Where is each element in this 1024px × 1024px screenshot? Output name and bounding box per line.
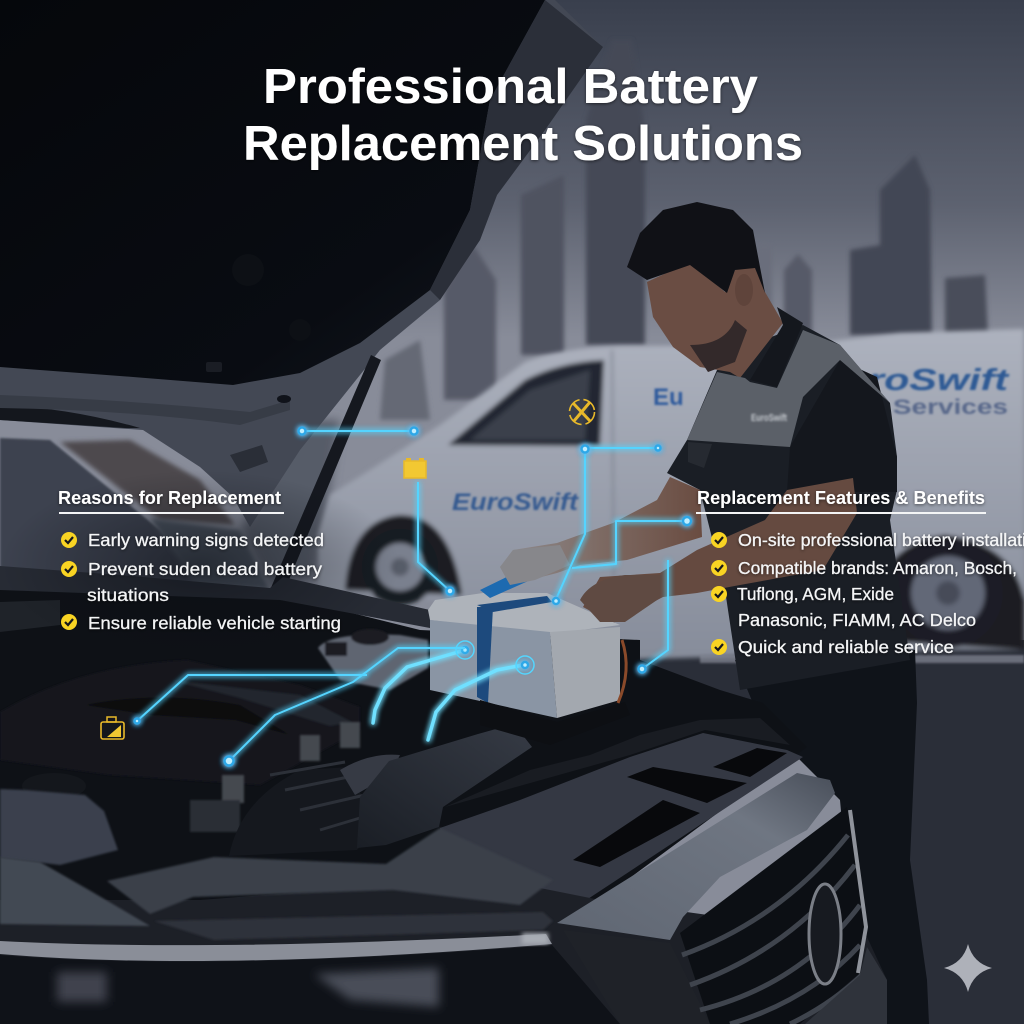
part: air box [357,724,532,848]
icon: battery level [101,717,124,739]
part: left reservoir body [0,789,118,865]
man: hand on terminal [580,575,662,622]
body: dark bumper corner [563,930,710,1024]
man: ear [735,274,753,306]
battery: shadow tray [480,700,630,745]
car: windshield behind hood [0,438,270,590]
part: left reservoir cap [22,773,86,799]
man: torso and head [500,202,910,690]
body: left fender plate [0,857,150,926]
part: right trim [440,718,803,922]
car: front body [0,773,887,1024]
body: long bar [154,912,553,940]
circuit: hood line [298,428,418,434]
man: face and neck [647,262,783,378]
van logo: rear panel: roSwift [868,362,1010,397]
body: headlight [0,933,620,1024]
man: collar [750,307,803,387]
item: prevent sudden dead battery: situations [87,585,169,605]
body: radiator shelf [107,828,553,914]
man: sleeve fill [787,360,897,492]
man: gray shirt panel [687,330,890,447]
background: service van [318,329,1024,660]
item: more brands: Panasonic, FIAMM, AC Delco [738,610,976,630]
title: Professional Battery [263,60,758,114]
background: asphalt ground [600,640,1024,1024]
item: more brands [711,584,976,630]
circuit: arm line [572,517,691,568]
van logo: rear panel [868,362,1010,419]
car: open hood [0,0,603,527]
circuit: ring two to engine [428,656,534,740]
circuit: ring one to engine [373,641,474,723]
part: washer reservoir [318,629,428,690]
body: chrome side trim [850,810,866,973]
panel: features and benefits [696,488,1024,657]
item: prevent sudden dead battery [61,559,322,605]
circuit: long line to injector [224,648,465,766]
item: prevent sudden dead battery: Prevent suden dead battery [88,559,322,579]
man: hand with tool [480,545,570,598]
car: engine bay [0,566,807,922]
body: chrome nose of hood [557,773,835,940]
item: compatible brands: Compatible brands: Amaron, Bosch, [738,558,1017,578]
van logo: rear panel: o Services [868,396,1008,419]
item: quick service: Quick and reliable service [738,637,954,657]
circuit: right terminal line [638,560,668,672]
body: lower shelf [0,880,887,1024]
background: area behind strut [240,420,340,590]
heading: features: Replacement Features & Benefits [697,488,985,508]
body: lower corner [805,947,887,1024]
icon: yellow battery [404,458,426,478]
part: sensors and bolts [190,722,360,832]
van logo: EuroSwift side door: EuroSwift [452,489,579,516]
heading: reasons: Reasons for Replacement [58,488,281,508]
circuit: top right line [553,446,660,604]
circuit: yellow battery icon line [418,482,454,594]
title: Replacement Solutions [243,117,803,171]
man: hair [627,202,765,293]
icon: crossed tools [570,400,594,424]
item: early warning: Early warning signs detected [88,530,324,550]
man: shirt pocket badge [688,442,712,468]
part: engine cover [0,660,360,785]
item: more brands: Tuflong, AGM, Exide [737,584,894,604]
circuit: line to left icon [134,675,367,724]
body: grille badge [809,884,841,984]
man: right arm reaching to battery [500,477,702,585]
title [243,60,803,171]
body: grille [680,807,866,1024]
icon: sparkle watermark [944,944,992,992]
man: beard [690,320,747,372]
man: legs [735,650,929,1024]
battery [428,593,630,745]
body: chrome strip [0,934,552,961]
car: hood strut [270,355,381,594]
darkening behind left text [0,470,400,660]
man: shirt logo: EuroSwift [751,413,788,424]
van logo: front door fragment: Eu [653,384,684,411]
man: left forearm [583,478,857,623]
part: intake duct [229,755,400,856]
item: reliable starting: Ensure reliable vehicle starting [88,613,341,633]
panel: reasons for replacement [58,488,341,633]
